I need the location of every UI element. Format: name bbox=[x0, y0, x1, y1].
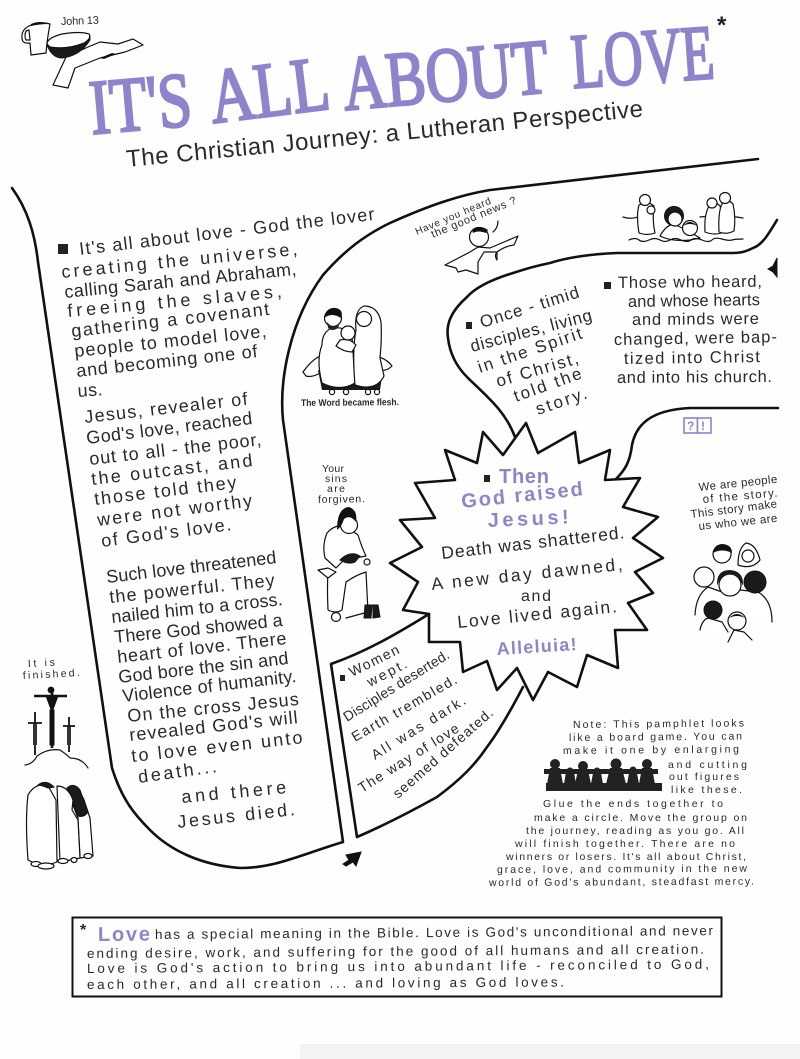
paragraph: Such love threatened the powerful: death... bbox=[137, 756, 218, 787]
paragraph: God the lover: people to model love, bbox=[73, 321, 267, 361]
panel: those who heard: Those who heard, bbox=[618, 273, 762, 292]
panel: those who heard: tized into Christ bbox=[624, 348, 760, 368]
panel: women wept: Disciples deserted. bbox=[340, 646, 452, 725]
paragraph: Such love threatened the powerful: On the cross Jesus bbox=[126, 689, 300, 726]
note text: Glue the ends together to bbox=[543, 798, 723, 810]
icon: Jesus forgiving kneeling person: Your bbox=[322, 463, 344, 475]
title: LOVE bbox=[568, 8, 717, 105]
starburst text: Alleluia! bbox=[496, 634, 577, 659]
headline: Then God raised Jesus: Then bbox=[499, 466, 549, 488]
panel: women wept: All was dark. bbox=[368, 692, 468, 763]
title: IT'S bbox=[86, 55, 195, 151]
paragraph: God the lover: calling Sarah and Abraham, bbox=[63, 259, 297, 302]
bullet bbox=[340, 675, 345, 681]
icon: cup, bread and towel: John 13 bbox=[61, 15, 99, 28]
closing: and there Jesus died: Jesus died. bbox=[176, 799, 296, 832]
paragraph: Jesus, revealer of God's love: of God's love. bbox=[100, 514, 232, 551]
panel: once-timid disciples: story. bbox=[533, 384, 589, 419]
panel: those who heard: and minds were bbox=[632, 310, 759, 329]
paragraph: God the lover: creating the universe, bbox=[60, 239, 298, 282]
panel: once-timid disciples: of Christ, bbox=[494, 349, 581, 391]
path outlines of the board-game road bbox=[12, 159, 778, 868]
panel: women wept: Earth trembled. bbox=[348, 671, 460, 745]
icon: holy family bbox=[301, 306, 399, 409]
note text: like a board game. You can bbox=[569, 730, 742, 744]
note text: Note: This pamphlet looks bbox=[573, 718, 744, 731]
panel: once-timid disciples: in the Spirit bbox=[475, 324, 585, 377]
panel: those who heard: and whose hearts bbox=[628, 291, 760, 311]
footnote box bbox=[72, 918, 722, 996]
note text bbox=[488, 718, 754, 889]
paragraph: God the lover bbox=[60, 204, 375, 401]
note text: winners or losers. It's all about Christ, bbox=[505, 851, 746, 863]
bullet bbox=[466, 322, 472, 329]
speech: we are people of the story: We are people bbox=[698, 474, 778, 494]
headline: Then God raised Jesus bbox=[460, 466, 584, 532]
icon: question and exclamation boxes bbox=[684, 418, 711, 433]
icon: Jesus forgiving kneeling person: forgiven. bbox=[318, 493, 365, 506]
icon: Jesus forgiving kneeling person: sins bbox=[325, 473, 347, 485]
icon: cup, bread and towel bbox=[22, 15, 143, 88]
panel: once-timid disciples: told the bbox=[511, 364, 584, 406]
closing: and there Jesus died bbox=[176, 777, 296, 832]
headline: Then God raised Jesus: Jesus! bbox=[487, 506, 569, 532]
paragraph: Such love threatened the powerful: revealed God's will bbox=[128, 707, 298, 745]
closing: and there Jesus died: and there bbox=[180, 777, 287, 807]
starburst text: Love lived again. bbox=[456, 596, 618, 632]
paragraph: Jesus, revealer of God's love: the outcast, and bbox=[90, 450, 253, 489]
speech: we are people of the story bbox=[690, 474, 778, 533]
icon: three crosses: finished. bbox=[23, 667, 80, 682]
note text: grace, love, and community in the new bbox=[497, 863, 747, 876]
panel: once-timid disciples bbox=[466, 283, 594, 419]
footnote box: ending desire, work, and suffering for the good of all humans and all creation. bbox=[87, 942, 704, 961]
panel: women wept: Women bbox=[346, 641, 402, 680]
icon: three crosses bbox=[23, 657, 88, 768]
starburst text: and bbox=[521, 588, 551, 605]
footnote box: each other, and all creation ... and loving as God loves. bbox=[87, 975, 564, 992]
arrow bbox=[343, 852, 361, 866]
title bbox=[86, 8, 717, 151]
paragraph: God the lover: us. bbox=[77, 379, 103, 401]
paragraph: Such love threatened the powerful: There God showed a bbox=[113, 610, 285, 647]
headline: Then God raised Jesus: God raised bbox=[460, 478, 584, 513]
panel: once-timid disciples: Once - timid bbox=[477, 283, 581, 332]
paragraph: Jesus, revealer of God's love: God's love, reached bbox=[85, 408, 253, 448]
panel: those who heard: changed, were bap- bbox=[614, 328, 777, 349]
paragraph: Such love threatened the powerful: the powerful. They bbox=[108, 570, 276, 607]
icon: person announcing with speech: Have you heard bbox=[414, 196, 493, 238]
paragraph: Jesus, revealer of God's love: were not worthy bbox=[95, 490, 253, 530]
bullet bbox=[484, 475, 490, 482]
paragraph: Jesus, revealer of God's love: out to all - the poor, bbox=[88, 429, 262, 469]
title: ABOUT bbox=[339, 22, 552, 127]
starburst bbox=[390, 423, 663, 700]
note text: will finish together. There are no bbox=[514, 838, 735, 850]
paragraph: Such love threatened the powerful bbox=[105, 547, 303, 787]
starburst text: A new day dawned, bbox=[430, 554, 623, 594]
note text: the journey, reading as you go. All bbox=[526, 825, 744, 837]
paragraph: Such love threatened the powerful: Such love threatened bbox=[105, 547, 277, 587]
icon: three crosses: It is bbox=[28, 657, 55, 670]
starburst text bbox=[430, 466, 625, 659]
paragraph: God the lover: gathering a covenant bbox=[70, 299, 270, 341]
paragraph: Jesus, revealer of God's love bbox=[83, 389, 262, 551]
paragraph: Jesus, revealer of God's love: those told they bbox=[93, 472, 237, 509]
starburst text: Death was shattered. bbox=[440, 522, 625, 563]
paragraph: Such love threatened the powerful: heart of love. There bbox=[116, 628, 287, 667]
subtitle: The Christian Journey: a Lutheran Perspective bbox=[125, 95, 644, 173]
note text: make it one by enlarging bbox=[563, 743, 739, 757]
note text: and cutting bbox=[668, 759, 747, 771]
icon: person announcing with speech: the good news ? bbox=[430, 195, 518, 241]
title asterisk: * bbox=[717, 12, 727, 39]
icon: Jesus forgiving kneeling person bbox=[318, 463, 380, 622]
small arrow at right edge bbox=[768, 258, 777, 277]
bullet bbox=[58, 244, 68, 254]
panel: women wept bbox=[340, 641, 496, 801]
paragraph: God the lover: It's all about love - God the lover bbox=[78, 204, 375, 259]
paragraph: Such love threatened the powerful: nailed him to a cross. bbox=[110, 589, 283, 627]
speech: we are people of the story: us who we are bbox=[698, 513, 778, 533]
paragraph: Jesus, revealer of God's love: Jesus, revealer of bbox=[83, 389, 249, 427]
speech: we are people of the story: of the story. bbox=[702, 487, 778, 506]
paragraph: God the lover: and becoming one of bbox=[75, 341, 259, 381]
icon: paper doll chain bbox=[544, 758, 662, 791]
footnote box: Love is God's action to bring us into abundant life - reconciled to God, bbox=[87, 957, 709, 976]
note text: make a circle. Move the group on bbox=[534, 812, 747, 824]
icon: holy family: The Word became flesh. bbox=[301, 397, 399, 409]
paragraph: Such love threatened the powerful: God bore the sin and bbox=[117, 648, 289, 687]
icon: Jesus forgiving kneeling person: are bbox=[327, 483, 345, 495]
icon: question and exclamation boxes: ? bbox=[687, 419, 694, 433]
panel: It's all about love text bbox=[58, 204, 375, 832]
footnote box: has a special meaning in the Bible. Love is God's unconditional and never bbox=[155, 923, 714, 942]
icon: baptism scene bbox=[623, 192, 743, 242]
panel: those who heard: and into his church. bbox=[617, 368, 772, 387]
icon: question and exclamation boxes: ! bbox=[701, 419, 705, 433]
icon: person announcing with speech bbox=[414, 195, 518, 274]
panel: those who heard bbox=[604, 273, 777, 387]
paragraph: God the lover: freeing the slaves, bbox=[67, 281, 282, 321]
panel: women wept: wept. bbox=[363, 656, 409, 690]
paragraph: Such love threatened the powerful: Violence of humanity. bbox=[121, 666, 297, 706]
panel: once-timid disciples: disciples, living bbox=[468, 306, 594, 356]
title: ALL bbox=[204, 39, 334, 140]
footnote box: * bbox=[80, 922, 87, 939]
panel: women wept: seemed defeated. bbox=[389, 705, 496, 801]
icon: grieving women bbox=[26, 782, 93, 869]
note text: like these. bbox=[671, 784, 742, 796]
speech: we are people of the story: This story make bbox=[690, 498, 778, 521]
note text: out figures bbox=[669, 771, 739, 783]
footnote box: Love bbox=[98, 924, 150, 946]
bullet bbox=[604, 282, 611, 289]
icon: group of people bbox=[694, 543, 772, 642]
note text: world of God's abundant, steadfast mercy. bbox=[488, 876, 754, 889]
paragraph: Such love threatened the powerful: to love even unto bbox=[130, 727, 303, 766]
panel: women wept: The way of love bbox=[355, 720, 462, 796]
